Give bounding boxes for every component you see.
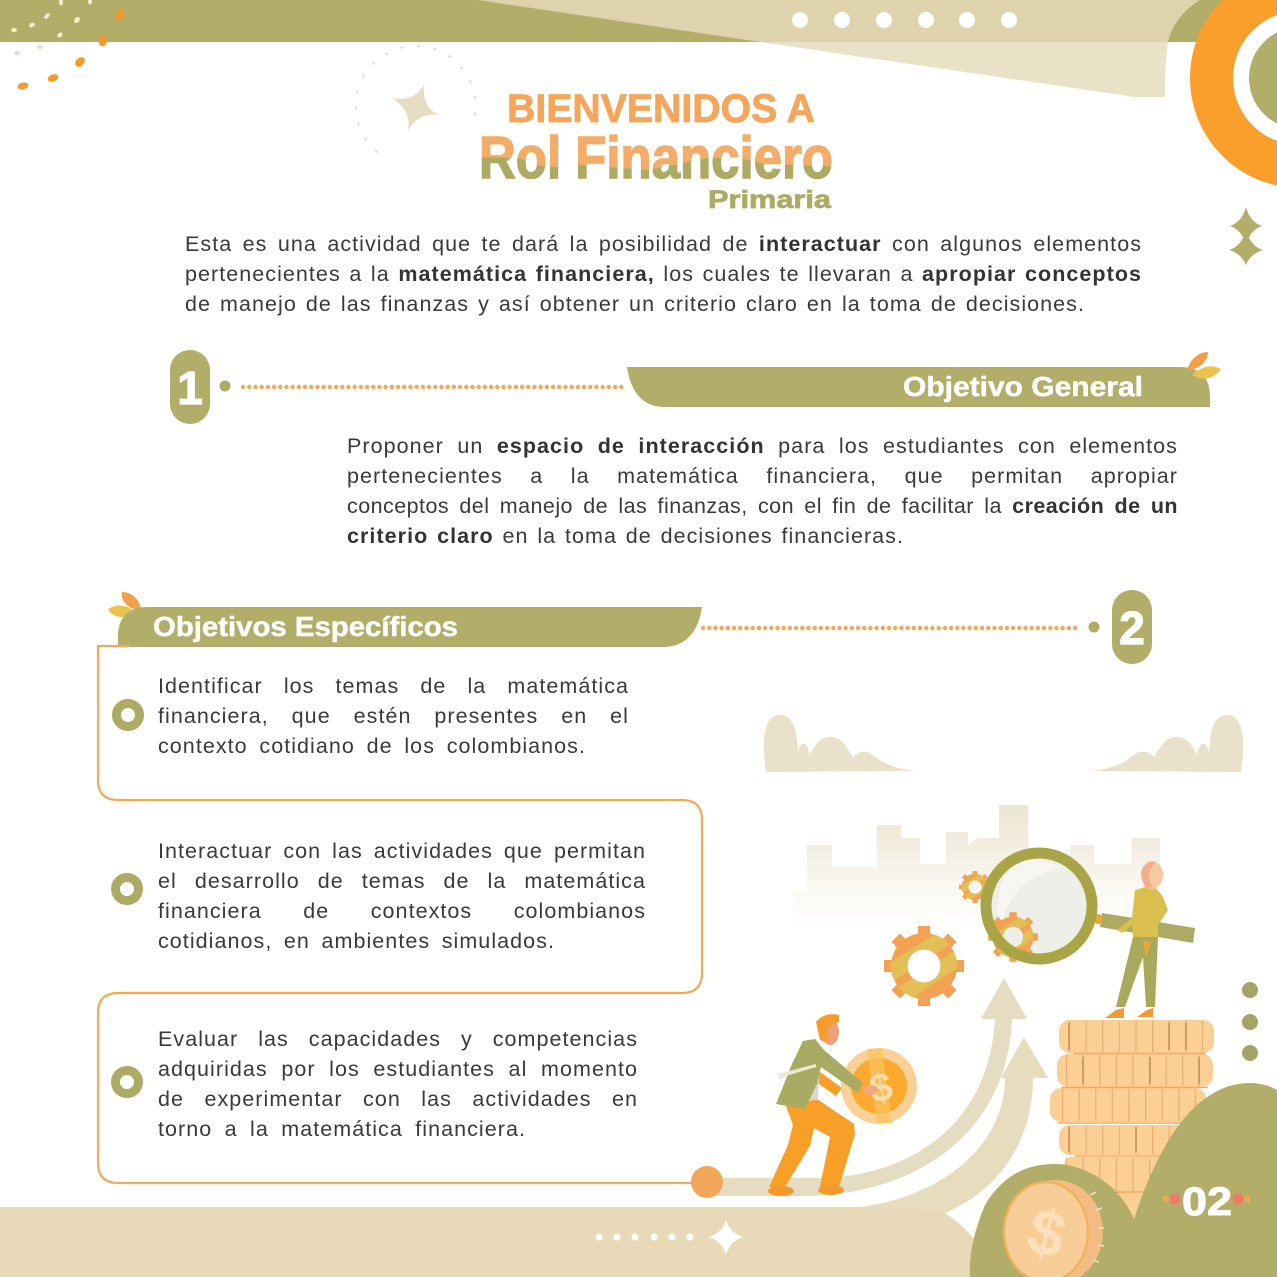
page number 02 <box>1162 1180 1250 1224</box>
city skyline <box>793 805 1160 928</box>
general objective text: pertenecientes a la matemática financiera, que permitan apropiar <box>347 464 1178 488</box>
specific objective 2 text: cotidianos, en ambientes simulados. <box>158 929 555 953</box>
rising arrow back <box>707 978 1027 1196</box>
big dollar coin: $ <box>1020 1194 1073 1272</box>
top band <box>0 0 1277 97</box>
man pushing coin <box>768 1014 917 1196</box>
rising arrow front <box>860 1037 1048 1222</box>
man pushing coin: $ <box>866 1064 896 1112</box>
general objective text <box>347 434 1178 548</box>
magnifying glass <box>985 853 1092 962</box>
intro paragraph: pertenecientes a la matemática financiera, los cuales te llevaran a apropiar conceptos <box>185 262 1142 286</box>
specific objective 1 text: Identificar los temas de la matemática <box>158 674 629 698</box>
general objective text: criterio claro en la toma de decisiones financieras. <box>347 524 904 548</box>
specific objective 1 text <box>158 674 629 758</box>
intro paragraph <box>185 232 1142 316</box>
bullet 1 <box>116 704 140 726</box>
cloud right <box>1089 715 1243 772</box>
bottom band <box>0 1207 992 1277</box>
dotted connector 1 <box>220 380 627 392</box>
title: rol financiero: Rol Financiero <box>479 125 833 191</box>
specific objective 1 text: contexto cotidiano de los colombianos. <box>158 734 586 758</box>
bullet 3 <box>116 1070 138 1094</box>
specific objective 3 text <box>158 1027 638 1141</box>
general objective text: conceptos del manejo de las finanzas, con el fin de facilitar la creación de un <box>347 494 1178 518</box>
banner: objetivo general <box>627 367 1210 407</box>
specific objective 1 text: financiera, que estén presentes en el <box>158 704 629 728</box>
big dollar coin <box>1004 1180 1104 1277</box>
intro paragraph: de manejo de las finanzas y así obtener un criterio claro en la toma de decisiones. <box>185 292 1085 316</box>
intro paragraph: Esta es una actividad que te dará la posibilidad de interactuar con algunos elementos <box>185 232 1142 256</box>
banner: objetivo general: Objetivo General <box>903 371 1143 402</box>
stack of coins <box>1050 1020 1214 1220</box>
side dots <box>1242 982 1258 1061</box>
magnifier handle <box>1093 913 1195 943</box>
specific objective 3 text: adquiridas por los estudiantes al momento <box>158 1057 638 1081</box>
specific objective 3 text: torno a la matemática financiera. <box>158 1117 526 1141</box>
number badge 2 <box>1112 590 1152 664</box>
dotted connector 2 <box>703 622 1100 632</box>
bullet 2 <box>116 878 138 900</box>
orange ring top right <box>1190 0 1277 188</box>
confetti top left <box>11 0 126 91</box>
leaves on general objective banner <box>1187 352 1221 379</box>
serpentine outline of objective boxes <box>98 646 707 1183</box>
olive hills <box>970 1083 1277 1277</box>
number badge 2: 2 <box>1119 602 1145 654</box>
title: bienvenidos a: BIENVENIDOS A <box>507 87 815 131</box>
specific objective 2 text: el desarrollo de temas de la matemática <box>158 869 646 893</box>
big gear <box>879 926 968 1006</box>
specific objective 2 text <box>158 839 646 953</box>
specific objective 3 text: de experimentar con las actividades en <box>158 1087 638 1111</box>
specific objective 2 text: Interactuar con las actividades que permitan <box>158 839 646 863</box>
sparkle icons right <box>1229 207 1263 265</box>
number badge 1 <box>170 350 210 424</box>
specific objective 3 text: Evaluar las capacidades y competencias <box>158 1027 638 1051</box>
woman on coins <box>1105 861 1168 1018</box>
cloud left <box>764 715 918 772</box>
banner: objetivos especificos <box>118 607 702 647</box>
number badge 1: 1 <box>177 362 203 414</box>
small gear <box>957 871 993 903</box>
star with dotted circle <box>356 46 476 152</box>
page number 02: 02 <box>1182 1180 1232 1224</box>
line end node <box>691 1166 723 1198</box>
white dots on top band <box>792 12 1017 28</box>
general objective text: Proponer un espacio de interacción para los estudiantes con elementos <box>347 434 1178 458</box>
specific objective 2 text: financiera de contextos colombianos <box>158 899 646 923</box>
leaves on specific objectives banner <box>108 592 141 617</box>
subtitle: primaria: Primaria <box>708 186 832 214</box>
banner: objetivos especificos: Objetivos Específicos <box>153 611 458 642</box>
